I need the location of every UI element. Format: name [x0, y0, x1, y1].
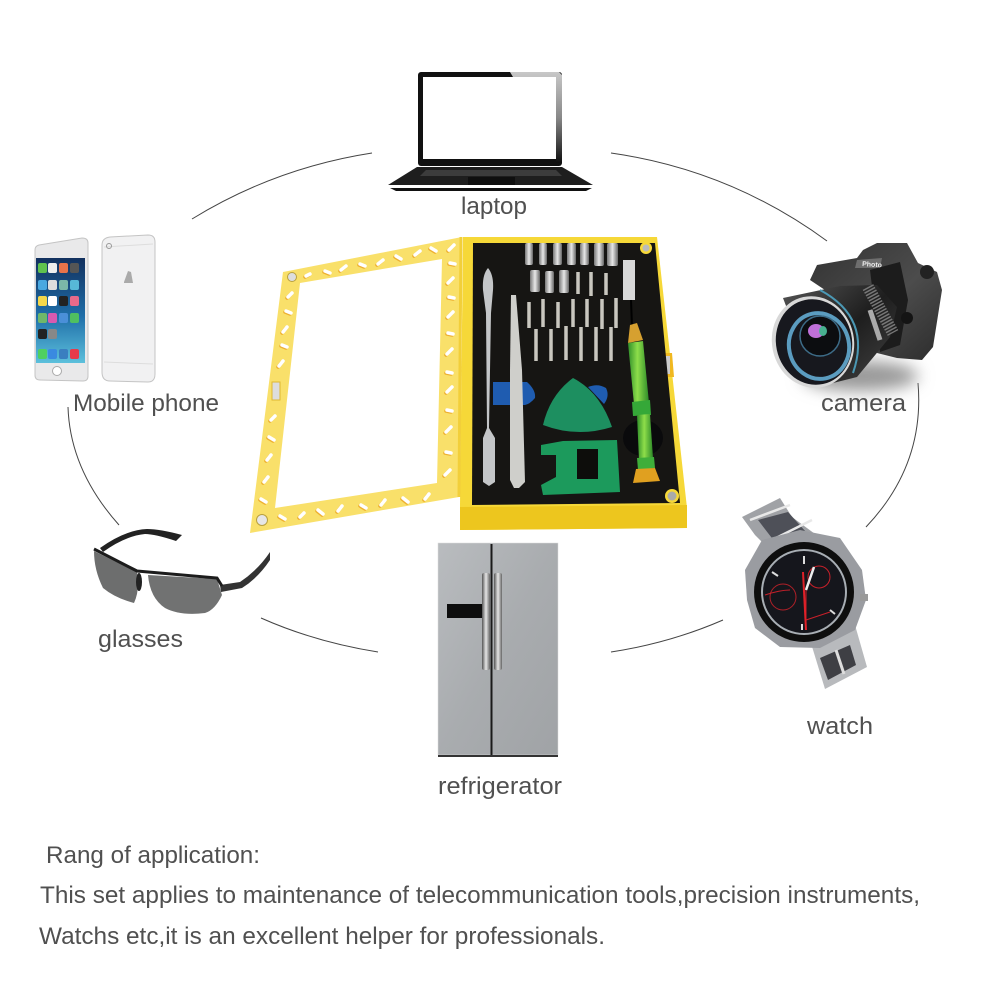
- icon: camera: Photo: [862, 261, 882, 269]
- screwdriver bits: [529, 272, 616, 361]
- box rivets: [640, 242, 679, 503]
- camera body: [810, 243, 942, 360]
- icon: watch: [742, 498, 868, 689]
- lens barrel: [783, 285, 897, 387]
- label: refrigerator: refrigerator: [438, 773, 562, 800]
- phone front: [35, 238, 88, 381]
- tweezers: [510, 295, 525, 488]
- watch case: [745, 530, 866, 648]
- kit box base: [460, 237, 687, 530]
- precision screwdriver: [623, 260, 660, 483]
- label: glasses: glasses: [98, 626, 183, 653]
- connecting arcs: [68, 153, 919, 652]
- icon: mobile phones: [35, 235, 155, 382]
- label: camera: camera: [821, 390, 907, 417]
- fridge display: [447, 604, 482, 618]
- watch strap top: [742, 498, 830, 562]
- kit foam tray: [472, 243, 680, 505]
- text block: range of application: This set applies to maintenance of telecommunication tools,precision instruments,: [40, 882, 920, 909]
- lenses: [94, 551, 138, 603]
- icon: refrigerator: [438, 543, 558, 757]
- icon: camera: [763, 243, 942, 396]
- camera shadow: [802, 361, 918, 391]
- label: laptop: laptop: [461, 193, 527, 220]
- fridge handles: [482, 573, 490, 670]
- icon: glasses: [94, 529, 270, 614]
- temples: [100, 529, 182, 552]
- tool kit: [250, 237, 687, 533]
- green triangular pick: [543, 378, 612, 432]
- text block: range of application: [39, 842, 920, 950]
- spudger: [483, 268, 495, 486]
- green magnetizer: [541, 440, 620, 495]
- lid cut-outs: [260, 245, 455, 520]
- lid latch slot: [272, 382, 280, 400]
- frame: [94, 549, 222, 586]
- lens front: [763, 288, 863, 396]
- blue inserts: [493, 382, 663, 456]
- open lid frame: [250, 237, 462, 533]
- watch strap bottom: [810, 625, 867, 689]
- label: watch: watch: [806, 713, 873, 740]
- phone back: [102, 235, 155, 382]
- label: mobile phone: Mobile phone: [73, 390, 219, 417]
- text block: range of application: Watchs etc,it is an excellent helper for professionals.: [39, 923, 605, 950]
- socket bits: [525, 243, 618, 293]
- icon: laptop: [388, 72, 593, 191]
- text block: range of application: Rang of application:: [46, 842, 260, 869]
